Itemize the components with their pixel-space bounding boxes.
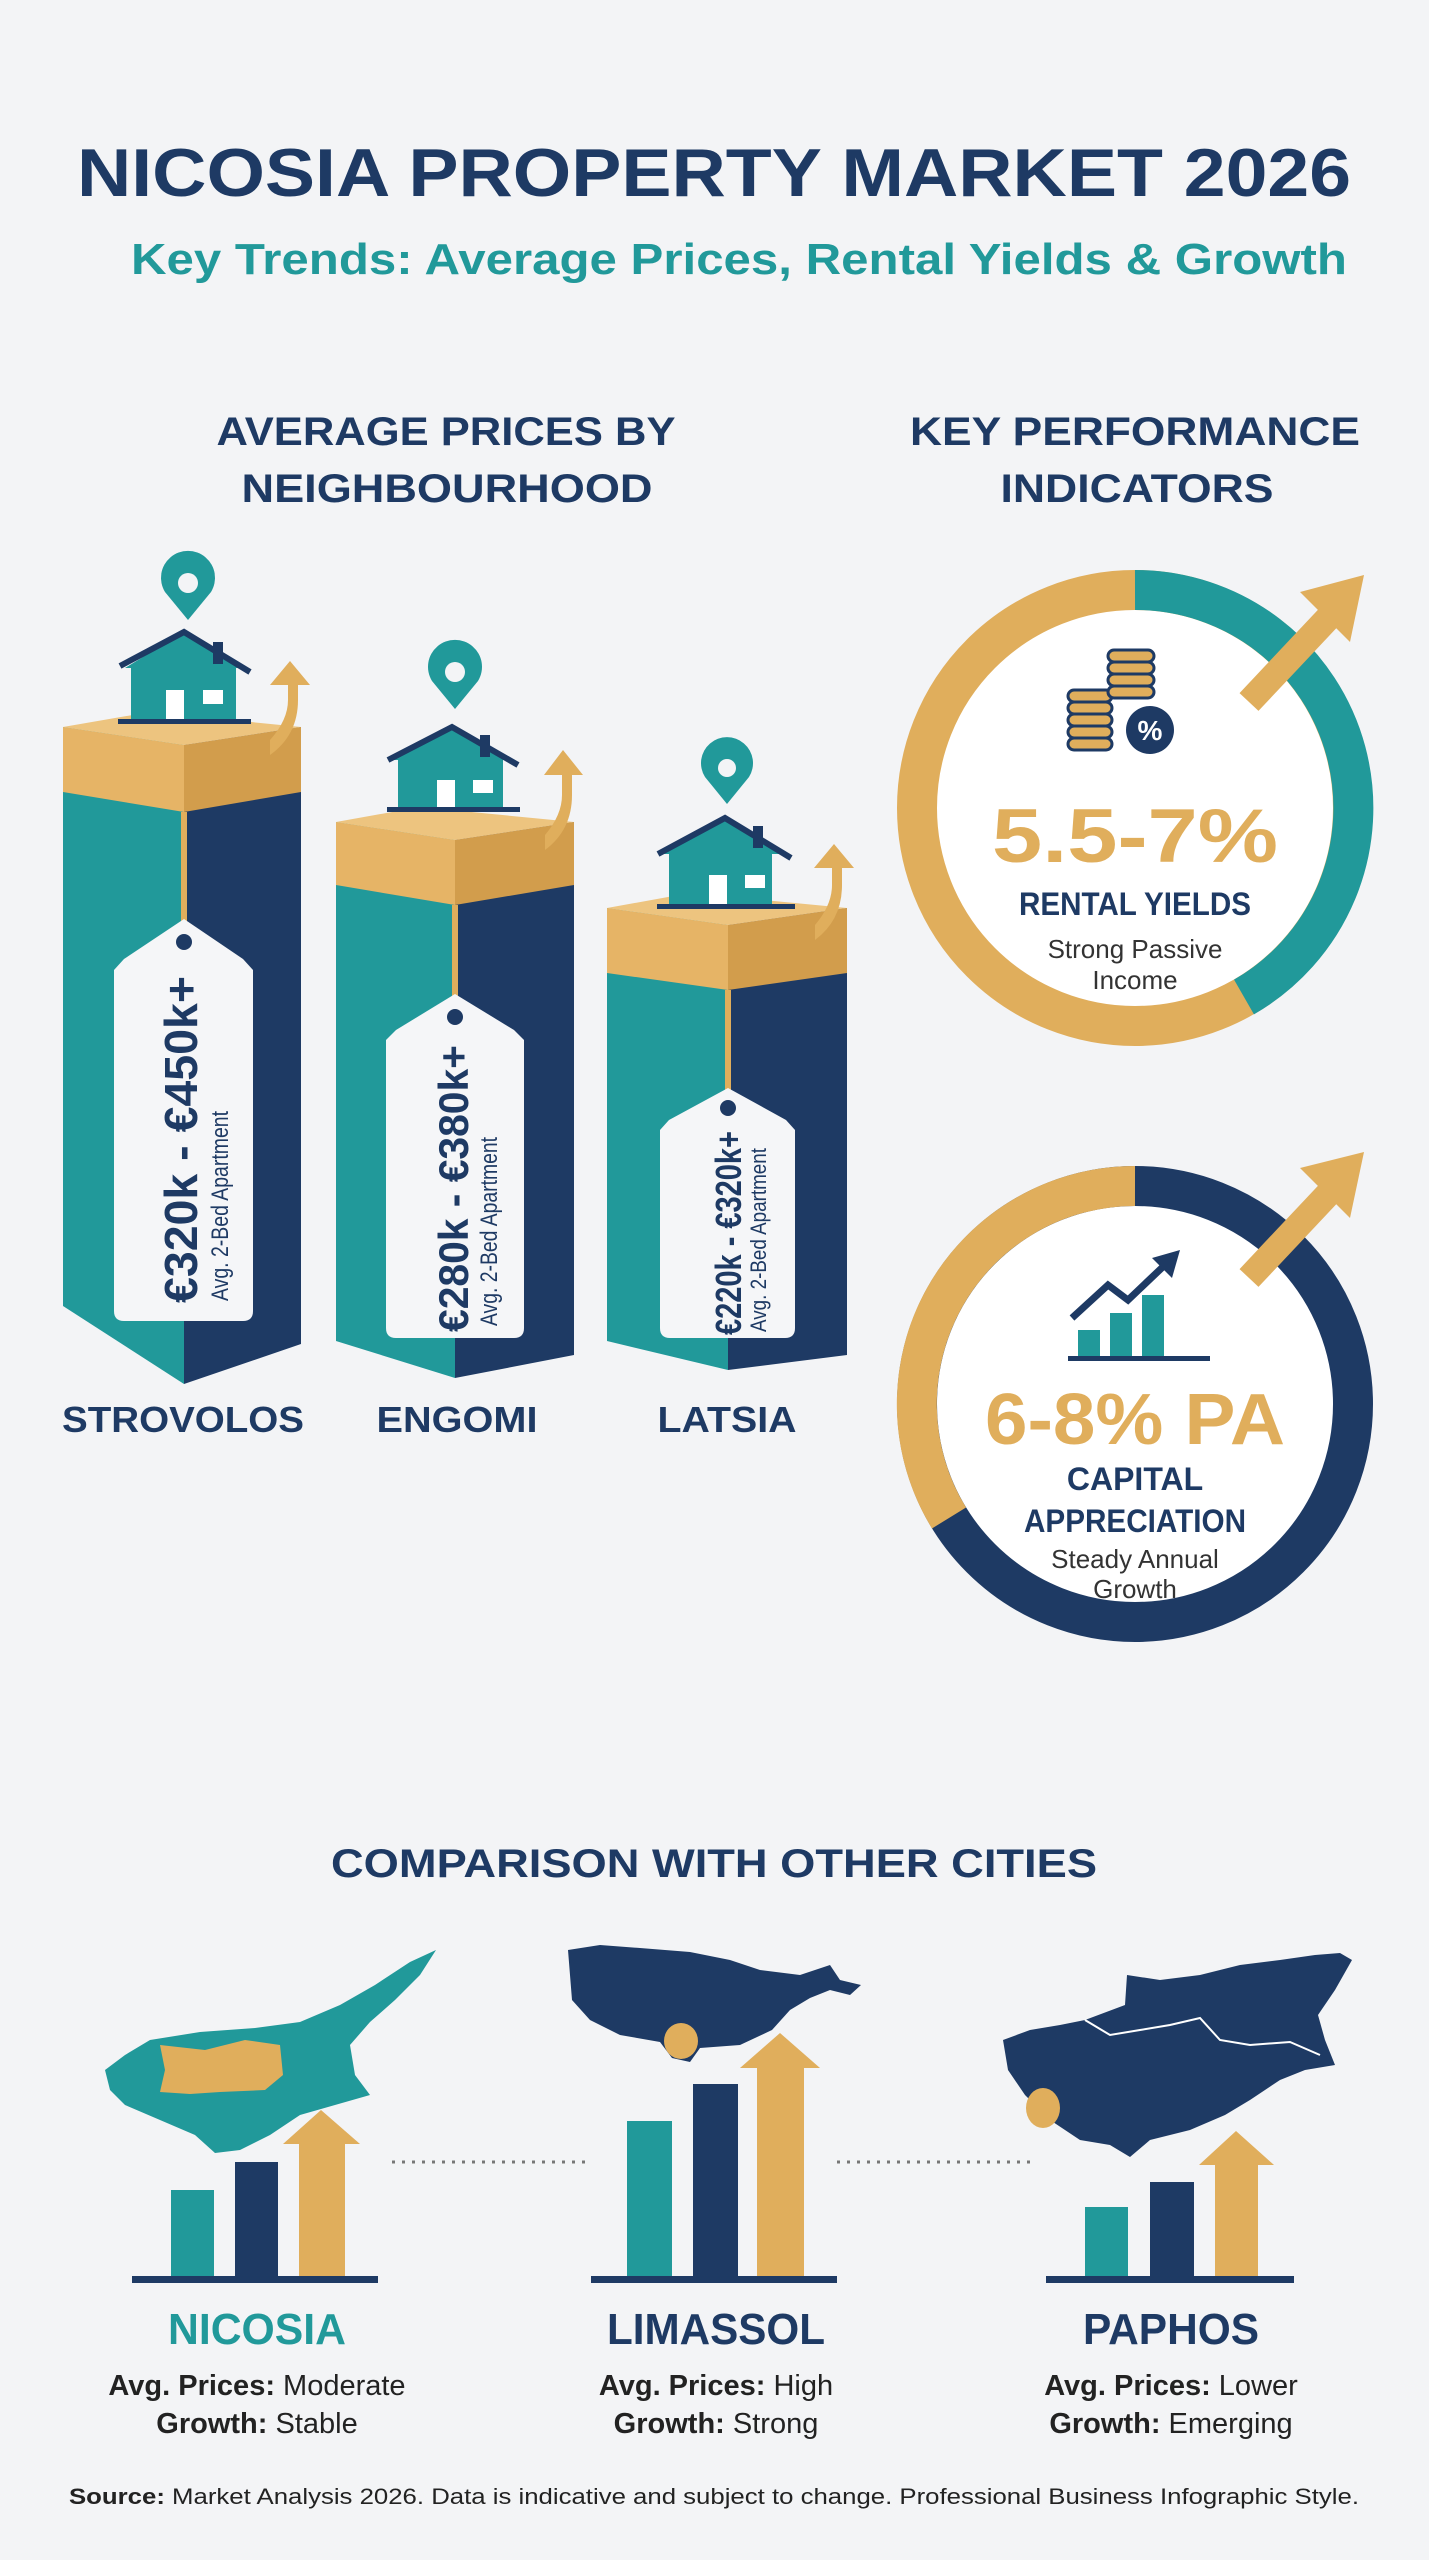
pin	[701, 737, 753, 804]
arrow	[270, 661, 310, 755]
price tag: €320k - €450k+	[155, 976, 207, 1303]
city: Paphos: PAPHOS	[1083, 2305, 1259, 2354]
source footnote: Source: Market Analysis 2026. Data is indicative and subject to change. Professional Business Infographic Style.	[69, 2484, 1359, 2509]
price tag: Avg. 2-Bed Apartment	[476, 1137, 503, 1326]
chart	[1046, 2131, 1294, 2283]
pin	[161, 551, 215, 620]
KPI: rental yields: Strong Passive	[1048, 934, 1222, 964]
price tag	[114, 919, 253, 1321]
price tag: Avg. 2-Bed Apartment	[746, 1148, 771, 1332]
KPI: capital appreciation: CAPITAL	[1067, 1461, 1203, 1497]
city: Nicosia: Growth: Stable	[156, 2408, 358, 2440]
bar: Engomi	[336, 640, 583, 1378]
price tag: Avg. 2-Bed Apartment	[207, 1111, 234, 1301]
KPI: capital appreciation: Growth	[1093, 1574, 1177, 1604]
KPI: capital appreciation: Steady Annual	[1051, 1544, 1219, 1574]
pin	[428, 640, 482, 709]
city: Nicosia	[105, 1950, 436, 2440]
price tag: €280k - €380k+	[430, 1045, 477, 1332]
city: Paphos: Avg. Prices: Lower	[1044, 2370, 1298, 2402]
KPI: rental yields: Income	[1092, 965, 1178, 995]
subtitle: Key Trends: Average Prices, Rental Yields & Growth	[131, 235, 1347, 284]
KPI: rental yields	[917, 575, 1364, 1026]
map	[568, 1945, 861, 2062]
value: 6-8% PA	[985, 1380, 1285, 1460]
neighbourhood labels: STROVOLOS	[62, 1399, 304, 1440]
arrow	[814, 844, 854, 940]
icon: coins: %	[1138, 715, 1163, 746]
city: Paphos: Growth: Emerging	[1049, 2408, 1293, 2440]
value: 5.5-7%	[992, 794, 1278, 879]
bar: Latsia	[607, 737, 854, 1370]
neighbourhood labels	[62, 1399, 796, 1440]
price tag	[386, 994, 524, 1338]
string	[452, 905, 458, 1017]
heading: average prices	[216, 410, 676, 511]
house	[387, 727, 520, 812]
neighbourhood labels: LATSIA	[658, 1399, 796, 1440]
arrow	[544, 750, 583, 850]
heading: comparison: COMPARISON WITH OTHER CITIES	[331, 1842, 1097, 1886]
string	[725, 990, 731, 1108]
city: Limassol: Growth: Strong	[614, 2408, 818, 2440]
city: Paphos	[1003, 1953, 1352, 2440]
heading: KPIs: KEY PERFORMANCE	[910, 410, 1360, 454]
price tag	[660, 1088, 795, 1338]
house	[657, 818, 795, 909]
chart	[132, 2110, 378, 2283]
city: Limassol: Avg. Prices: High	[599, 2370, 833, 2402]
city: Nicosia: Avg. Prices: Moderate	[108, 2370, 406, 2402]
map	[105, 1950, 436, 2153]
icon: growth chart	[1068, 1250, 1210, 1361]
KPI: capital appreciation: APPRECIATION	[1024, 1503, 1246, 1539]
price tag: €220k - €320k+	[708, 1131, 749, 1335]
KPI: capital appreciation	[917, 1152, 1364, 1622]
chart	[591, 2033, 837, 2283]
heading: average prices: AVERAGE PRICES BY	[216, 410, 676, 454]
arrow	[1249, 575, 1364, 702]
house	[118, 632, 251, 724]
bar: Strovolos	[63, 551, 310, 1384]
city: Limassol: LIMASSOL	[607, 2305, 825, 2354]
title: NICOSIA PROPERTY MARKET 2026	[77, 135, 1351, 211]
city: Nicosia: NICOSIA	[168, 2305, 346, 2354]
heading: average prices: NEIGHBOURHOOD	[242, 467, 652, 511]
icon: coins	[1068, 650, 1174, 754]
neighbourhood labels: ENGOMI	[376, 1399, 538, 1440]
map	[1003, 1953, 1352, 2157]
heading: KPIs	[910, 410, 1360, 511]
KPI: rental yields: RENTAL YIELDS	[1019, 886, 1251, 922]
city: Limassol	[568, 1945, 861, 2440]
heading: KPIs: INDICATORS	[1000, 467, 1274, 511]
string	[181, 812, 187, 942]
arrow	[1249, 1152, 1364, 1278]
